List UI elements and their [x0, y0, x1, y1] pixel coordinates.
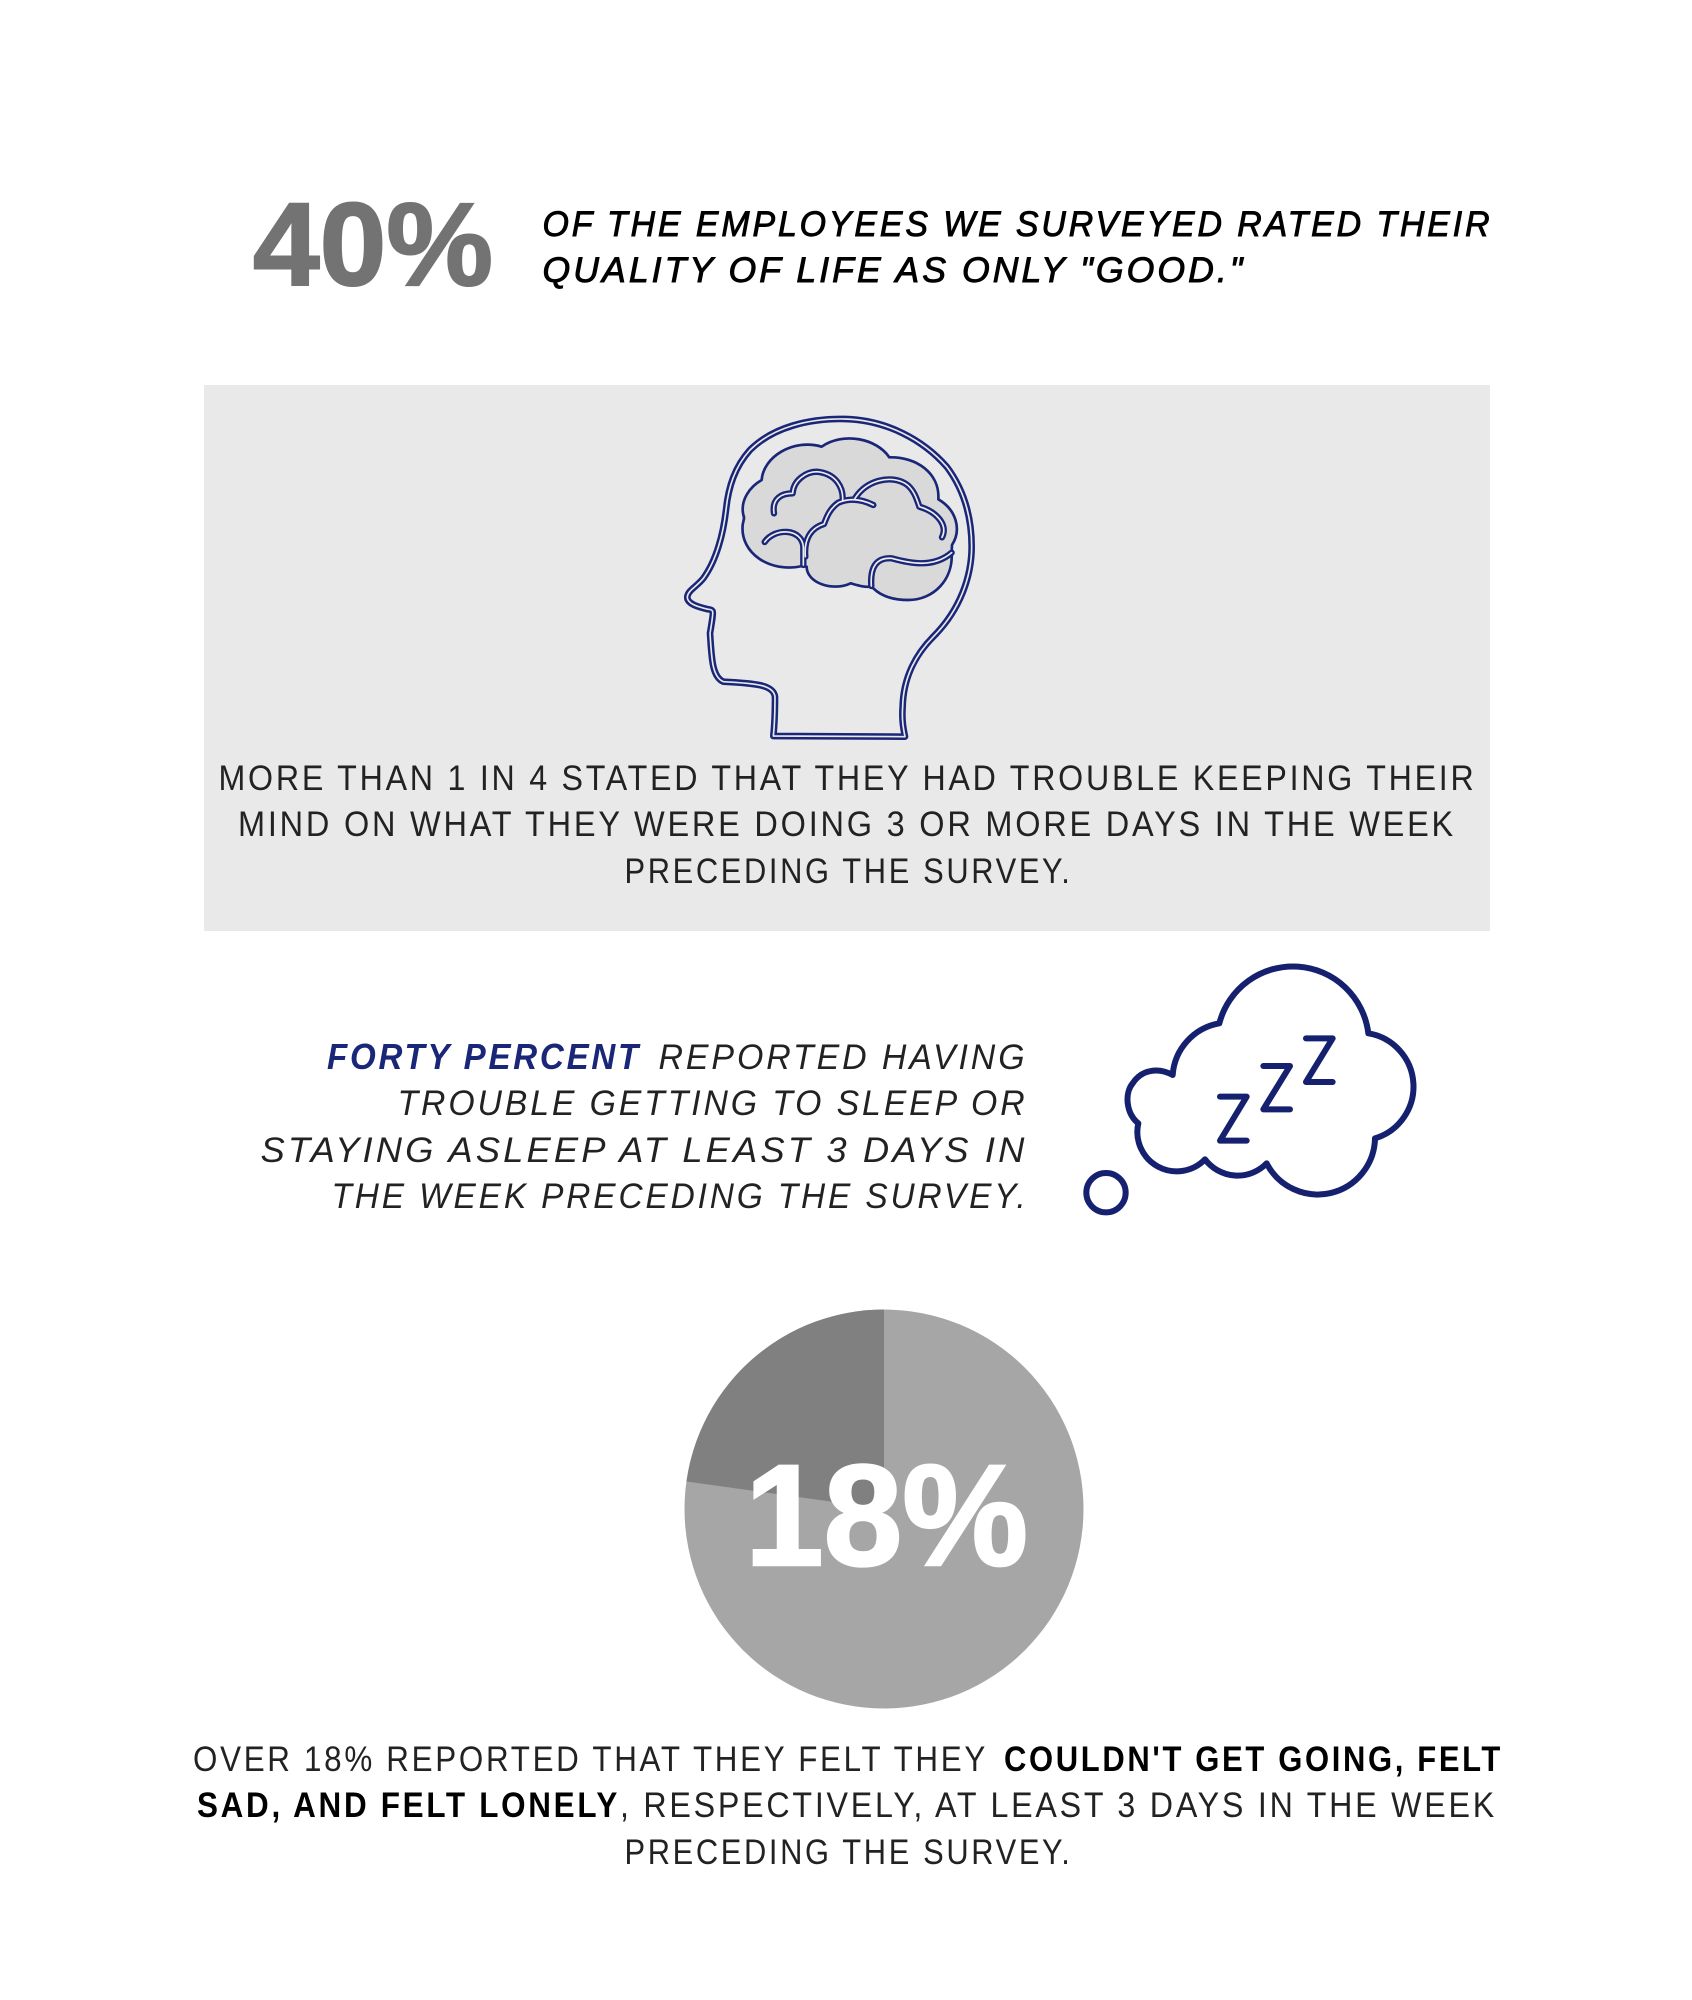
- text: trouble keeping mind on task: PRECEDING THE SURVEY.: [624, 852, 1072, 891]
- text: trouble sleeping: TROUBLE GETTING TO SLEEP OR: [398, 1084, 1028, 1123]
- text: quality of life statement: OF THE EMPLOYEES WE SURVEYED RATED THEIR: [542, 205, 1492, 244]
- text: trouble keeping mind on task: MORE THAN 1 IN 4 STATED THAT THEY HAD TROUBLE KEEPING THEIR: [218, 759, 1476, 798]
- icon: thought cloud with sleeping Zs: [1086, 966, 1413, 1212]
- text: could not get going, sad, lonely: PRECEDING THE SURVEY.: [624, 1833, 1072, 1872]
- pie chart: [684, 1310, 1084, 1708]
- statistic: 18%: 18%: [745, 1435, 1028, 1596]
- text: could not get going, sad, lonely: COULDN'T GET GOING, FELT: [1004, 1740, 1503, 1779]
- statistic: 40%: 40%: [253, 179, 493, 311]
- text: trouble keeping mind on task: MIND ON WHAT THEY WERE DOING 3 OR MORE DAYS IN THE WEEK: [238, 805, 1456, 844]
- text: trouble sleeping: [260, 1036, 1028, 1216]
- text: could not get going, sad, lonely: , RESPECTIVELY, AT LEAST 3 DAYS IN THE WEEK: [620, 1786, 1497, 1825]
- text: trouble sleeping: FORTY PERCENT: [327, 1036, 641, 1077]
- text: trouble keeping mind on task: [218, 759, 1476, 891]
- text: could not get going, sad, lonely: OVER 18% REPORTED THAT THEY FELT THEY: [193, 1740, 988, 1779]
- text: trouble sleeping: THE WEEK PRECEDING THE SURVEY.: [332, 1177, 1028, 1216]
- text: trouble sleeping: STAYING ASLEEP AT LEAST 3 DAYS IN: [260, 1131, 1028, 1170]
- panel: concentration: [204, 385, 1490, 931]
- text: quality of life statement: QUALITY OF LIFE AS ONLY "GOOD.": [542, 251, 1246, 290]
- text: trouble sleeping: REPORTED HAVING: [658, 1038, 1028, 1077]
- text: quality of life statement: [542, 205, 1492, 290]
- text: could not get going, sad, lonely: SAD, AND FELT LONELY: [197, 1786, 620, 1825]
- icon: head with brain: [687, 419, 972, 737]
- text: could not get going, sad, lonely: [193, 1740, 1503, 1872]
